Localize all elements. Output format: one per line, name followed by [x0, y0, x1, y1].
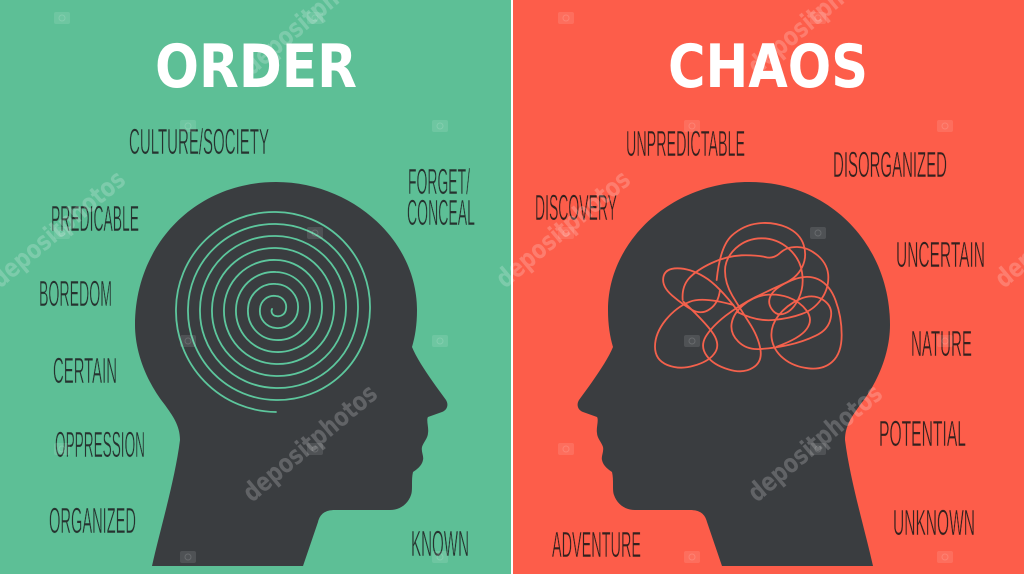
order head silhouette [135, 182, 447, 566]
chaos head silhouette [578, 182, 890, 566]
order labels: ORGANIZED [49, 500, 136, 541]
panel: chaos [513, 0, 1024, 574]
order labels [39, 121, 475, 564]
watermarks: depositphotos [490, 165, 637, 294]
watermarks: depositphotos [237, 379, 384, 508]
chaos labels: ADVENTURE [552, 524, 641, 565]
order labels: CULTURE/SOCIETY [129, 121, 269, 162]
panel: order: CONCEAL [407, 192, 475, 233]
spiral [176, 212, 370, 412]
title: order: ORDER [155, 32, 357, 102]
order labels: BOREDOM [39, 273, 112, 314]
chaos labels [535, 123, 985, 565]
title: chaos: CHAOS [668, 32, 868, 102]
panel: order: KNOWN [411, 523, 469, 564]
chaos labels: UNPREDICTABLE [626, 123, 745, 164]
panel: order: FORGET/ [408, 161, 470, 202]
watermarks: depositphotos [742, 379, 889, 508]
order labels: CERTAIN [53, 350, 117, 391]
chaos labels: DISCOVERY [535, 187, 617, 228]
tangled scribble [655, 223, 842, 371]
order labels: PREDICABLE [51, 198, 139, 239]
order labels: OPPRESSION [55, 424, 145, 465]
panel: order [0, 0, 511, 574]
